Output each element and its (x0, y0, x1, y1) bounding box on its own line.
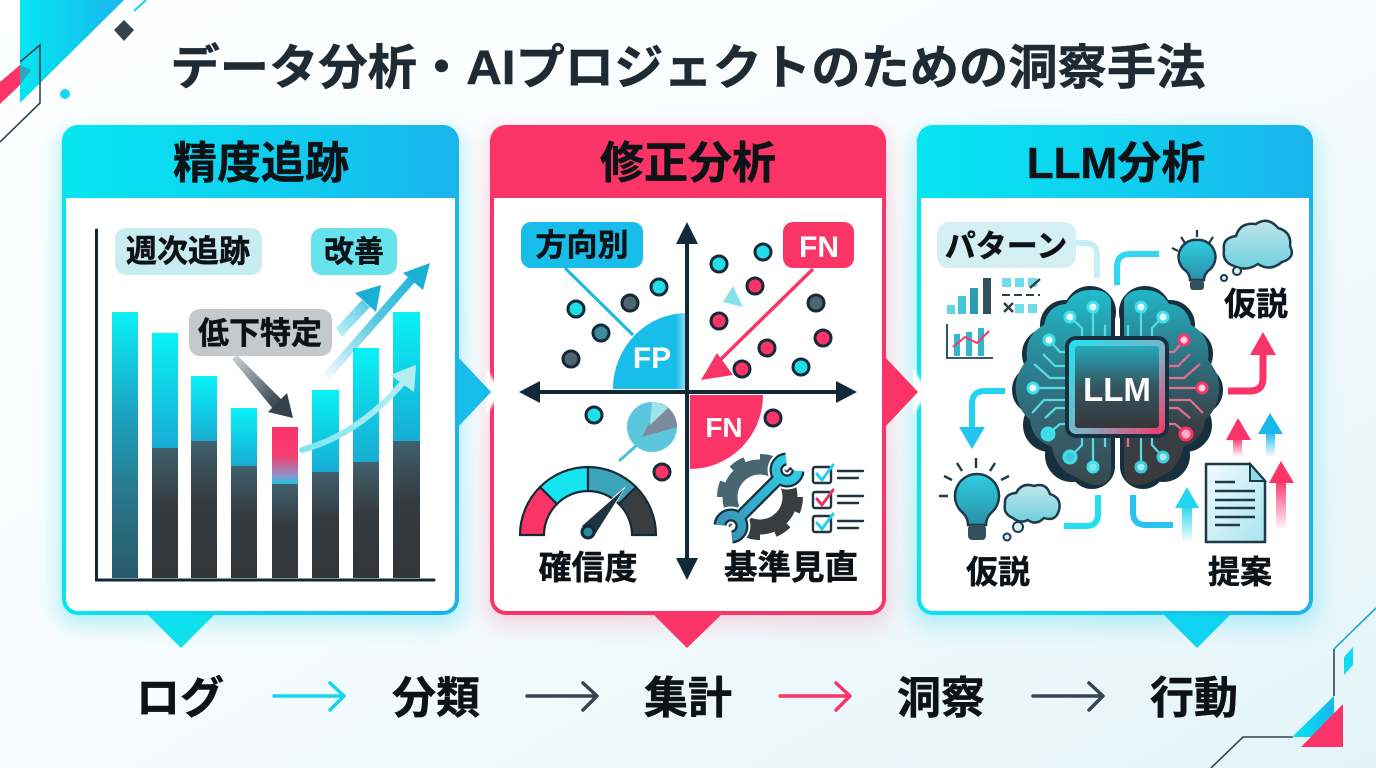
arrow: cyan up (1175, 487, 1199, 541)
arrow: dark (1033, 683, 1103, 710)
arrow: tall pink up (1269, 461, 1294, 528)
title: データ分析・AIプロジェクトのための洞察手法 (170, 42, 1206, 95)
process flow (136, 674, 1238, 723)
arrow: recovery curve (302, 365, 416, 450)
chart axes (96, 230, 434, 580)
arrow: long improvement trend (323, 263, 430, 380)
panel body (921, 198, 1309, 611)
label: decline identification (189, 309, 332, 356)
panel: LLM analysis (917, 125, 1313, 615)
step: action: 行動 (1150, 674, 1238, 723)
icon: confidence gauge (520, 467, 656, 538)
step: aggregate: 集計 (644, 674, 732, 723)
heading: correction analysis: 修正分析 (600, 139, 776, 188)
arrow: pink (780, 683, 850, 710)
LLM chip: LLM (1083, 371, 1151, 408)
label: criteria review: 基準見直 (724, 550, 858, 587)
heading: LLM analysis: LLM分析 (1027, 139, 1205, 188)
brain circuits right (1128, 307, 1203, 467)
wrench fill (720, 459, 798, 537)
step: log: ログ (136, 674, 224, 723)
panel body (494, 198, 882, 611)
arrow: dark (527, 683, 597, 710)
heading: accuracy tracking: 精度追跡 (173, 139, 349, 188)
leader line: direction label to FP (565, 268, 633, 335)
label: hypothesis lower: 仮説 (966, 554, 1030, 590)
decoration: bottom-right corner shapes (1211, 608, 1376, 768)
label: weekly tracking (115, 228, 262, 275)
label: by direction: 方向別 (536, 228, 628, 263)
gear lower half (730, 466, 803, 540)
arrow: cyan (274, 683, 344, 710)
FN quadrant (690, 395, 763, 469)
icon: gear and wrench (720, 458, 799, 537)
FP quadrant: FP (633, 342, 671, 375)
icon: mini bar chart (947, 278, 991, 314)
icon: upper light bulb (1172, 230, 1215, 290)
step: classify: 分類 (392, 674, 480, 723)
brain circuit nodes left (1028, 302, 1098, 472)
scatter points (563, 244, 831, 480)
quadrant axes (519, 222, 857, 580)
arrow: FN label to quadrant (701, 269, 813, 380)
icon: mini grid (1002, 278, 1040, 313)
icon: mini line and bar chart (947, 324, 993, 358)
arrow: short improvement trend (336, 285, 381, 337)
icon: lower thought cloud (1004, 485, 1060, 540)
icon: document (1206, 464, 1265, 542)
pointer: panel 2 (654, 615, 721, 648)
wrench halo (720, 459, 798, 537)
brain right hemisphere (1122, 289, 1220, 486)
pointer: panel 3 (1164, 615, 1230, 648)
LLM chip (1065, 336, 1169, 438)
icon: magnified pie (619, 402, 677, 461)
panel: accuracy tracking (62, 125, 459, 615)
step: insight: 洞察 (897, 674, 985, 723)
icon: LLM brain (1015, 289, 1220, 486)
icon: upper thought cloud (1221, 221, 1292, 281)
label: confidence: 確信度 (538, 549, 638, 586)
label: proposal: 提案 (1208, 554, 1272, 590)
arrow: small blue up (1258, 413, 1283, 456)
label: decline identification: 低下特定 (198, 316, 322, 351)
arrow head: connector down (959, 427, 985, 449)
arrow: panel 2 to panel 3 (886, 358, 928, 426)
panel: correction analysis (490, 125, 886, 615)
arrow: panel 1 to panel 2 (459, 358, 501, 426)
FN quadrant: FN (705, 412, 743, 443)
FP quadrant (613, 313, 687, 389)
label: improvement (311, 228, 397, 275)
connectors around the brain (972, 243, 1173, 526)
label: by direction (521, 222, 643, 268)
small teal triangle marker (723, 286, 743, 307)
icon: lower light bulb (939, 458, 1009, 540)
arrow: drop indicator (232, 355, 293, 418)
label: weekly tracking: 週次追跡 (126, 234, 250, 269)
arrow: pink up-turn (1228, 332, 1276, 391)
label: pattern: パターン (945, 229, 1067, 264)
arrow: small pink up (1226, 418, 1251, 456)
brain left hemisphere (1015, 289, 1113, 486)
icon: checklist (813, 465, 863, 532)
label: FN: FN (799, 231, 839, 264)
label: hypothesis upper: 仮説 (1224, 286, 1288, 322)
panel glow shadows (58, 132, 1317, 624)
bar chart (112, 312, 420, 578)
wrench outline (720, 459, 798, 537)
label: improvement: 改善 (324, 236, 384, 269)
gear upper half (717, 454, 790, 528)
decoration: top-left corner shapes (0, 0, 146, 142)
brain circuits left (1032, 307, 1105, 467)
panel body (66, 198, 455, 611)
label: pattern (937, 222, 1076, 268)
label: FN (783, 222, 854, 268)
brain circuit nodes right (1136, 302, 1207, 472)
pointer: panel 1 (148, 615, 214, 648)
